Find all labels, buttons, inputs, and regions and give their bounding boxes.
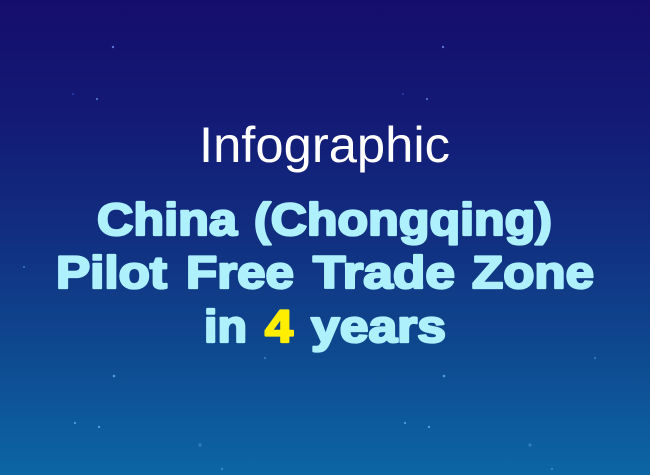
title line: in 4 years: in	[204, 301, 247, 352]
title line: China (Chongqing): China	[97, 194, 238, 245]
title line: Pilot Free Trade Zone: Pilot	[56, 247, 167, 298]
title line: China (Chongqing): (Chongqing)	[254, 194, 552, 245]
title line: in 4 years: 4	[265, 301, 293, 352]
background stars	[23, 46, 596, 470]
title line: China (Chongqing)	[97, 194, 552, 245]
heading: Infographic: Infographic	[199, 117, 450, 173]
title line: Pilot Free Trade Zone: Free	[186, 247, 294, 298]
title line: Pilot Free Trade Zone: Trade	[313, 247, 455, 298]
title line: in 4 years: years	[311, 301, 446, 352]
title line: Pilot Free Trade Zone	[56, 247, 594, 298]
title block	[56, 194, 594, 352]
title line: in 4 years	[204, 301, 446, 352]
title line: Pilot Free Trade Zone: Zone	[472, 247, 594, 298]
